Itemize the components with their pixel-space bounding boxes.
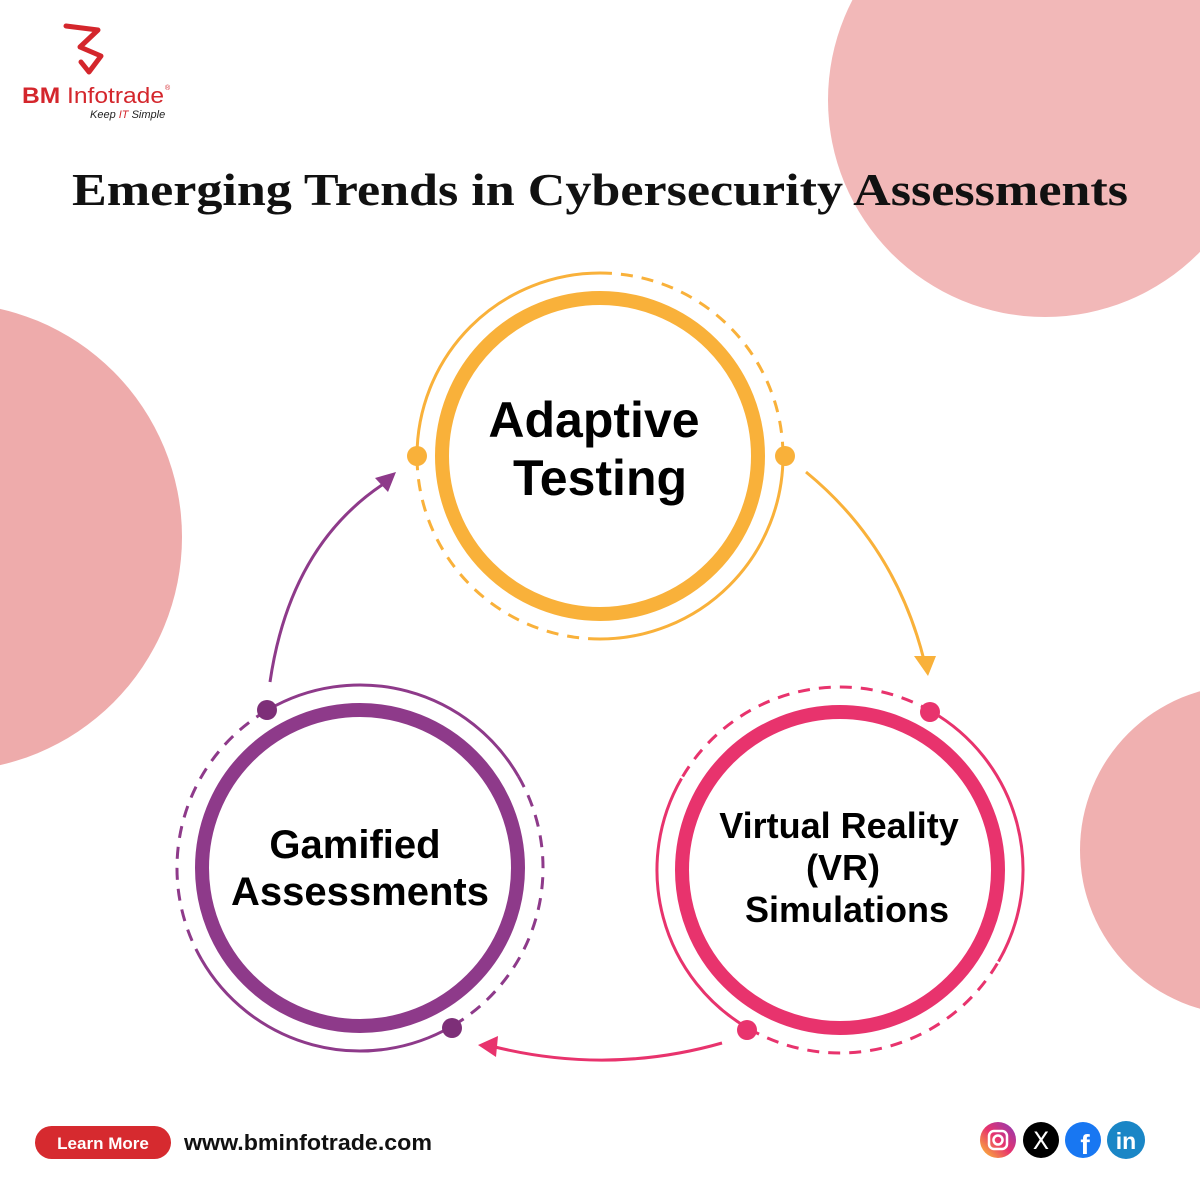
footer: learn more button: Learn More xyxy=(57,1134,149,1153)
decorative pink circle left xyxy=(0,303,182,771)
footer: website: www.bminfotrade.com xyxy=(183,1130,432,1155)
node: Virtual Reality (VR) Simulations xyxy=(657,687,1023,1053)
logo: ® xyxy=(165,84,171,92)
label: Assessments xyxy=(231,870,489,914)
social icons xyxy=(980,1121,1145,1160)
node: Gamified Assessments xyxy=(177,685,543,1051)
label: Testing xyxy=(513,450,687,506)
icon: facebook xyxy=(1065,1122,1101,1160)
title: Emerging Trends in Cybersecurity Assessments xyxy=(72,164,1128,215)
icon: instagram xyxy=(980,1122,1016,1158)
icon: linkedin xyxy=(1107,1121,1145,1159)
label: (VR) xyxy=(806,847,880,888)
logo icon xyxy=(66,26,101,72)
footer: learn more button xyxy=(35,1126,171,1159)
node: Adaptive Testing xyxy=(407,273,795,639)
logo wordmark: BM Infotrade xyxy=(22,83,164,108)
label: Gamified xyxy=(269,823,441,867)
label: Adaptive xyxy=(488,392,700,448)
icon: facebook: f xyxy=(1080,1129,1090,1160)
label: Virtual Reality xyxy=(719,805,959,846)
icon: linkedin: in xyxy=(1116,1128,1136,1154)
decorative pink circle bottom-right xyxy=(1080,685,1200,1015)
arrow: VR to gamified xyxy=(478,1036,722,1060)
logo xyxy=(22,26,171,121)
arrow: adaptive to VR xyxy=(806,472,936,676)
icon: x xyxy=(1023,1122,1059,1158)
logo tagline: Keep IT Simple xyxy=(90,109,165,121)
icon: x: X xyxy=(1033,1127,1049,1155)
arrow: gamified to adaptive xyxy=(270,472,396,682)
label: Simulations xyxy=(745,889,949,930)
decorative pink circle top-right xyxy=(828,0,1200,317)
